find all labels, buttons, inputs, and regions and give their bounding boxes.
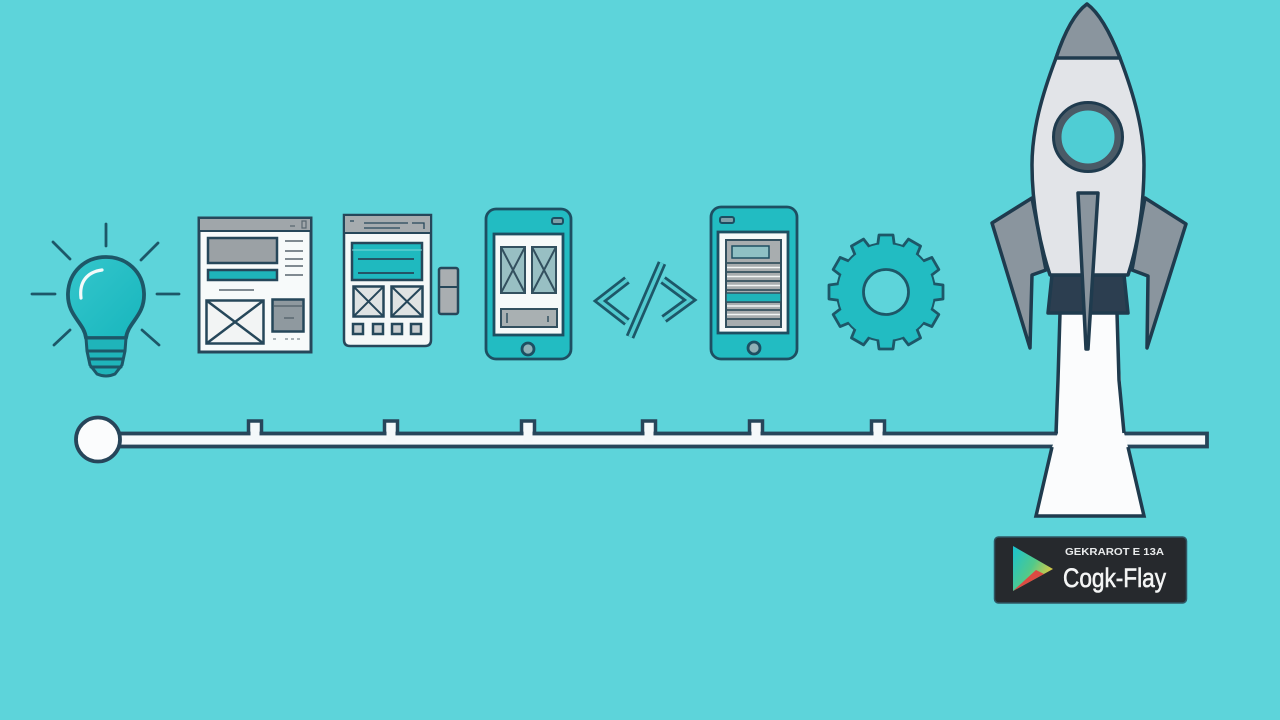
phone screen — [494, 234, 563, 335]
badge small text: GEKRAROT E 13A — [1065, 546, 1164, 558]
right fin — [1132, 198, 1186, 348]
exhaust fill — [1036, 313, 1144, 516]
phone body — [486, 209, 571, 359]
teal bar — [208, 270, 277, 280]
hero image block — [208, 238, 277, 263]
article rows — [726, 263, 781, 319]
browser window — [199, 218, 311, 352]
porthole — [1058, 107, 1118, 167]
small panel — [272, 300, 304, 332]
code glyph inner — [600, 263, 690, 337]
icon: phone wireframe — [486, 209, 571, 359]
center fin — [1078, 193, 1098, 349]
bulb rays — [32, 224, 179, 345]
icon: tablet wireframe — [344, 215, 458, 346]
teal row — [726, 293, 781, 302]
nose cone — [1056, 4, 1120, 58]
phone screen — [718, 232, 788, 333]
teal content block — [352, 243, 422, 280]
gear teeth — [829, 235, 943, 349]
phone button — [522, 343, 534, 355]
side widget — [439, 268, 458, 314]
bulb highlight — [81, 270, 102, 298]
article header — [732, 246, 769, 258]
engine nozzle — [1048, 275, 1128, 313]
timeline ticks — [248, 421, 884, 437]
rocket body — [1032, 4, 1144, 275]
tablet header — [344, 215, 431, 233]
timeline bar — [98, 434, 1207, 446]
image placeholders — [354, 286, 422, 316]
rocket exhaust — [1036, 313, 1144, 516]
store badge — [994, 537, 1186, 603]
bulb glass — [68, 257, 144, 338]
porthole rim — [1054, 102, 1122, 172]
phone body — [711, 207, 797, 359]
text lines — [219, 241, 303, 290]
timeline start node — [76, 418, 120, 462]
icon: phone article layout — [711, 207, 797, 359]
gear root outline — [836, 242, 936, 342]
browser header — [199, 218, 311, 231]
article frame — [726, 240, 781, 327]
footer dots — [273, 338, 302, 340]
image placeholder — [206, 300, 264, 344]
tick openings — [250, 424, 882, 442]
badge large text: Cogk-Flay — [1063, 563, 1166, 593]
phone speaker — [720, 217, 734, 223]
phone bottom bar — [501, 309, 557, 327]
code glyph outlines — [600, 263, 690, 337]
badge background — [994, 537, 1186, 603]
play icon — [1013, 546, 1053, 591]
icon: light bulb — [32, 224, 179, 376]
icon: desktop wireframe — [199, 218, 311, 352]
gear hole — [864, 270, 908, 314]
gear body — [838, 244, 934, 340]
small panel lines — [274, 306, 302, 318]
icon: gear — [829, 235, 943, 349]
tablet body — [344, 215, 431, 346]
small buttons — [353, 324, 421, 334]
icon: code brackets — [600, 263, 690, 337]
browser header icons — [290, 221, 306, 228]
icon: rocket — [992, 4, 1186, 349]
exhaust outlines — [1036, 313, 1144, 516]
image placeholders — [501, 247, 556, 293]
timeline track — [76, 418, 1207, 462]
left fin — [992, 198, 1046, 348]
phone speaker — [552, 218, 563, 224]
bulb base — [86, 338, 126, 376]
phone button — [748, 342, 760, 354]
